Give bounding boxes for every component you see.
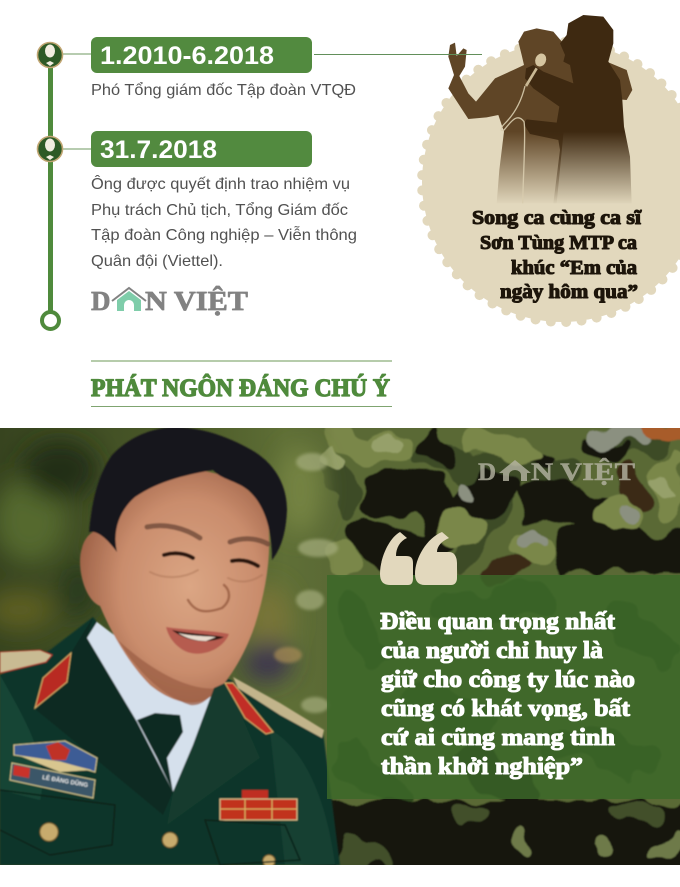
badge: duet with singer (422, 15, 680, 322)
caption: Sơn Tùng MTP ca (480, 232, 637, 254)
logo: Dân Việt (91, 286, 248, 316)
uniform buttons (40, 823, 275, 867)
portrait of the general (0, 427, 340, 867)
quote text: cũng có khát vọng, bất (381, 696, 630, 722)
watermark logo: D (478, 459, 496, 486)
brows and eyes (147, 526, 268, 611)
epaulettes (0, 650, 52, 673)
date label: 31.7.2018: 31.7.2018 (100, 136, 217, 164)
silhouette: front singer (523, 15, 632, 203)
photo backdrop (0, 428, 338, 865)
quote text: cứ ai cũng mang tinh (381, 725, 615, 751)
shirt (87, 622, 214, 792)
date label: 31.7.2018 (91, 131, 312, 167)
timeline end circle (42, 312, 59, 329)
photo and camouflage band (0, 410, 680, 887)
text block: second role: Quân đội (Viettel). (91, 253, 223, 270)
section heading: PHÁT NGÔN ĐÁNG CHÚ Ý (91, 373, 390, 402)
scalloped circle (422, 42, 680, 322)
tie (137, 713, 183, 792)
text block: first role: Phó Tổng giám đốc Tập đoàn VTQĐ (91, 81, 356, 99)
silhouette: rear singer (448, 28, 632, 203)
pocket flaps (0, 790, 300, 865)
text block: second role: Ông được quyết định trao nhiệm vụ (91, 174, 350, 193)
lapels (36, 617, 173, 815)
logo: Dân Việt: D (91, 286, 110, 316)
medal ribbons (220, 790, 297, 820)
name tag: LÊ ĐĂNG DŨNG (42, 773, 89, 789)
collar tabs (35, 653, 71, 708)
date label: 1.2010-6.2018 (91, 37, 312, 73)
logo: Dân Việt: N VIỆT (145, 286, 248, 316)
timeline (38, 42, 91, 329)
text block: second role (91, 174, 357, 270)
icon: person node 2 (38, 136, 62, 162)
quote text: của người chỉ huy là (381, 638, 603, 664)
quote panel (327, 532, 680, 799)
quote text: thần khởi nghiệp” (381, 754, 583, 780)
neck and face (80, 470, 269, 703)
connector to badge (314, 54, 482, 56)
icon: person node 1 (38, 42, 62, 68)
watermark logo (478, 458, 635, 486)
caption: khúc “Em của (511, 257, 637, 279)
hair (89, 427, 287, 560)
quote text: giữ cho công ty lúc nào (381, 667, 635, 693)
uniform jacket (0, 617, 340, 865)
quote text (380, 609, 635, 780)
watermark logo: N VIỆT (531, 458, 635, 486)
text block: second role: Phụ trách Chủ tịch, Tổng Giám đốc (91, 201, 348, 219)
mouth (166, 627, 229, 654)
microphone and cable (501, 52, 548, 203)
rank badge (14, 741, 97, 772)
camouflage background (304, 428, 680, 865)
date label: 1.2010-6.2018: 1.2010-6.2018 (100, 42, 274, 70)
caption (472, 207, 643, 303)
text block: second role: Tập đoàn Công nghiệp – Viễn thông (91, 225, 357, 244)
name tag (10, 763, 95, 798)
caption: ngày hôm qua” (500, 281, 638, 303)
quotation mark (380, 532, 457, 585)
quote text: Điều quan trọng nhất (380, 609, 615, 635)
silhouette: duet singers (448, 15, 632, 203)
caption: Song ca cùng ca sĩ (472, 207, 643, 229)
